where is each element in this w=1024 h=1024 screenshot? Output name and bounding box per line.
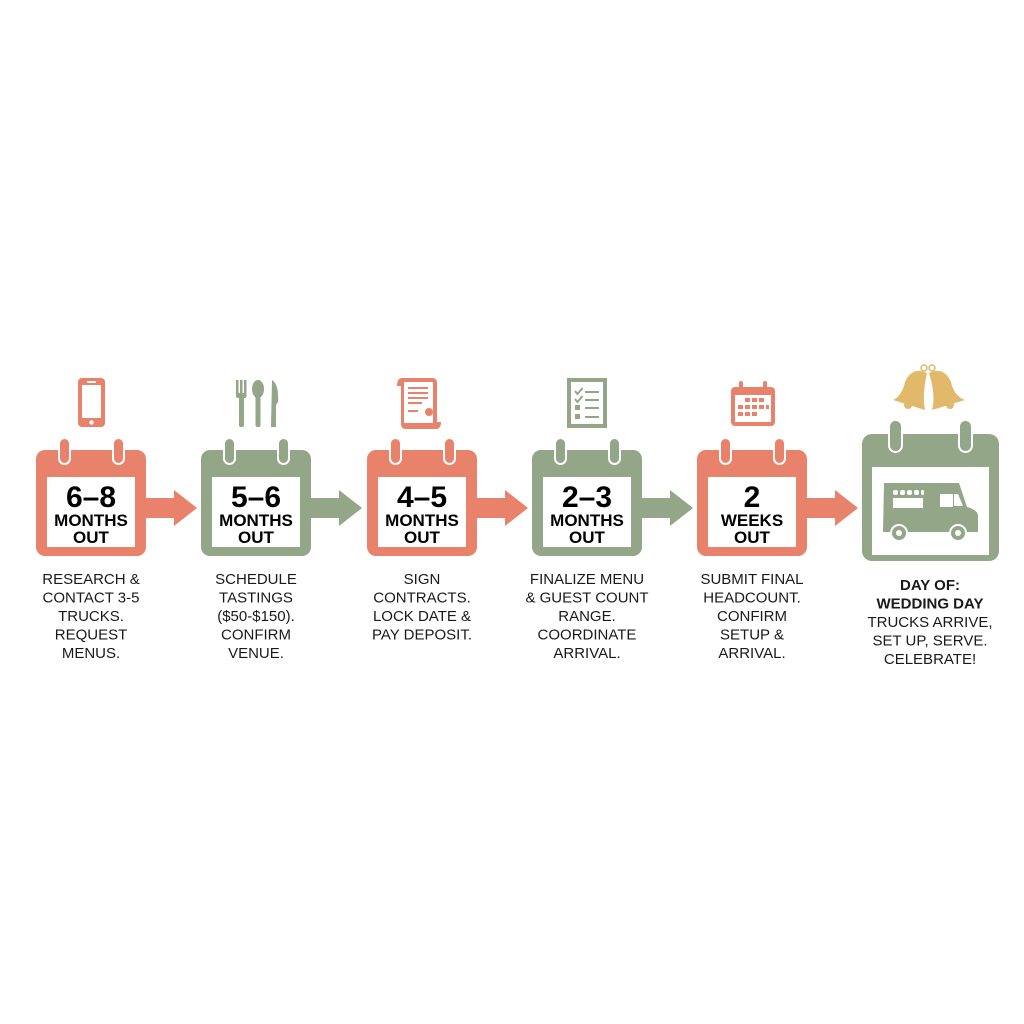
step 5 calendar: 2 <box>744 481 760 514</box>
step 2 calendar <box>201 438 311 556</box>
text: step 1: CONTACT 3-5 <box>43 590 139 606</box>
step 4 calendar: 2–3 <box>562 481 612 514</box>
text: step 4: RANGE. <box>558 608 616 625</box>
step 1 calendar <box>36 438 146 556</box>
step 5 calendar: WEEKS <box>721 511 783 530</box>
text: step 4: COORDINATE <box>538 626 636 644</box>
arrow 5 <box>807 490 858 526</box>
step 1 calendar: 6–8 <box>66 481 116 514</box>
text: step 2: TASTINGS <box>219 590 293 606</box>
arrow 2 <box>311 490 362 526</box>
text: step 3: PAY DEPOSIT. <box>372 626 472 644</box>
text: step 5: HEADCOUNT. <box>703 590 801 606</box>
text: step 3: LOCK DATE & <box>373 608 471 625</box>
step 1 calendar: OUT <box>73 528 110 547</box>
text: step 2: CONFIRM <box>221 626 291 644</box>
icon: utensils <box>236 380 278 427</box>
step 5 calendar <box>697 438 807 556</box>
step 1 calendar: MONTHS <box>54 511 128 530</box>
text: step 1: RESEARCH & <box>42 571 140 588</box>
text: step 5: SETUP & <box>720 626 784 644</box>
step 4 calendar: MONTHS <box>550 511 624 530</box>
text: step 4: ARRIVAL. <box>553 645 621 662</box>
step 2 calendar: MONTHS <box>219 511 293 530</box>
text: step 5: ARRIVAL. <box>718 645 786 662</box>
text: step 1: MENUS. <box>62 645 120 662</box>
step 4 calendar: OUT <box>569 528 606 547</box>
step 5 calendar: OUT <box>734 528 771 547</box>
step 2 calendar: 5–6 <box>231 481 281 514</box>
step 3 calendar: OUT <box>404 528 441 547</box>
text: step 6: CELEBRATE! <box>884 651 976 668</box>
text: step 4: & GUEST COUNT <box>525 590 649 606</box>
icon: contract scroll <box>397 378 441 429</box>
text: step 5: CONFIRM <box>717 608 787 625</box>
step 4 calendar <box>532 438 642 556</box>
step 3 calendar: 4–5 <box>397 481 447 514</box>
text: step 5: SUBMIT FINAL <box>700 571 804 588</box>
arrow 3 <box>477 490 528 526</box>
text: step 6: TRUCKS ARRIVE, <box>867 614 993 631</box>
step 2 calendar: OUT <box>238 528 275 547</box>
icon: checklist <box>567 378 607 428</box>
icon: food truck <box>883 483 978 541</box>
text: step 6: DAY OF: <box>900 577 960 594</box>
step 3 calendar <box>367 438 477 556</box>
text: step 4: FINALIZE MENU <box>530 571 644 588</box>
icon: small calendar <box>731 381 775 426</box>
text: step 1: TRUCKS. <box>58 608 124 625</box>
icon: phone <box>78 378 105 427</box>
step texts <box>42 571 993 668</box>
arrow 4 <box>642 490 693 526</box>
icon: wedding bells <box>893 365 965 410</box>
text: step 2: ($50-$150). <box>217 608 295 625</box>
text: step 2: VENUE. <box>228 645 284 662</box>
step 3 calendar: MONTHS <box>385 511 459 530</box>
text: step 1: REQUEST <box>55 626 127 644</box>
text: step 3: SIGN <box>404 571 440 588</box>
text: step 6: SET UP, SERVE. <box>872 632 988 650</box>
step 6 big calendar with truck <box>862 420 999 561</box>
text: step 2: SCHEDULE <box>215 571 297 588</box>
text: step 3: CONTRACTS. <box>373 590 471 606</box>
arrow 1 <box>146 490 197 526</box>
text: step 6: WEDDING DAY <box>877 596 983 612</box>
